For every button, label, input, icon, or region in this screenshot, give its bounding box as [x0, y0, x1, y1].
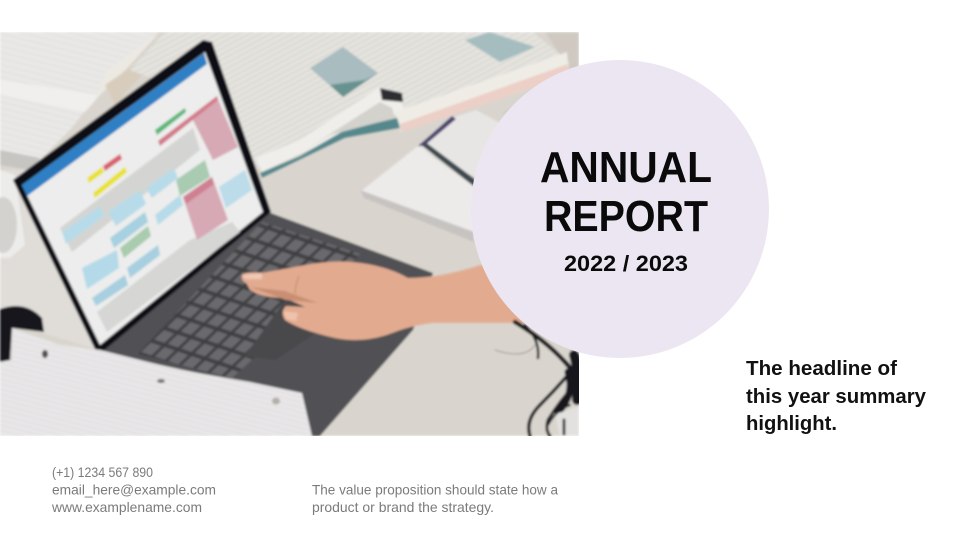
contact details: www.examplename.com: [51, 499, 202, 515]
hand and arm: [242, 262, 525, 340]
photo: laptop on desk with books: [0, 32, 579, 436]
mug and dark object at left: [0, 170, 44, 362]
spiral notebook: [360, 110, 500, 242]
value proposition text: [312, 482, 558, 515]
torn notebook paper: [0, 328, 312, 436]
headline text: this year summary: [746, 385, 927, 408]
year label: 2022 / 2023: [564, 251, 688, 276]
title: REPORT: [544, 192, 708, 241]
value proposition text: The value proposition should state how a: [312, 482, 558, 498]
laptop screen: [13, 40, 271, 352]
laptop base and keyboard: [100, 212, 433, 436]
headline text: [746, 357, 927, 435]
contact details: email_here@example.com: [52, 482, 216, 498]
hair: [495, 322, 579, 436]
title: ANNUAL: [540, 143, 712, 192]
value proposition text: product or brand the strategy.: [312, 499, 494, 515]
contact details: [51, 464, 216, 515]
headline text: highlight.: [746, 412, 837, 435]
open book, top left: [0, 32, 160, 170]
headline text: The headline of: [746, 357, 897, 380]
open magazine, top centre: [130, 32, 569, 178]
lilac title circle: [471, 60, 769, 358]
title: [540, 143, 712, 241]
contact details: (+1) 1234 567 890: [52, 464, 153, 480]
